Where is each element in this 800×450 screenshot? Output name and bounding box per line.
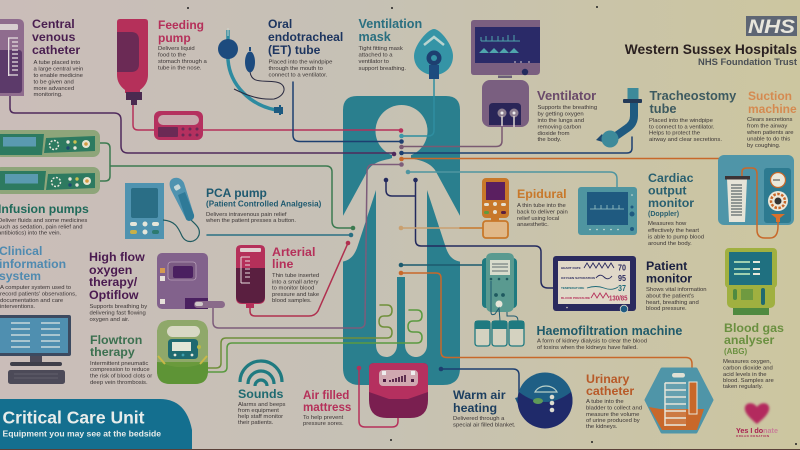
description: blood gas analyser: carbon dioxide and — [723, 366, 773, 372]
heading: air filled mattress: mattress — [303, 401, 351, 414]
heading: ventilation mask: mask — [358, 30, 392, 44]
tube: warm air — [439, 367, 519, 396]
description: central venous catheter: to enable medicine — [34, 73, 84, 79]
heading: blood gas analyser: analyser — [724, 333, 774, 347]
description: urinary catheter: A tube into the — [586, 399, 624, 405]
heading: arterial line: Arterial — [272, 245, 315, 259]
description: arterial line: pressure and take — [272, 292, 320, 298]
heading: clinical information system: information — [0, 257, 66, 271]
heading: epidural: Epidural — [517, 187, 567, 201]
heading: haemofiltration machine: Haemofiltration machine — [536, 324, 682, 338]
tube: central venous catheter — [10, 94, 396, 156]
heading: high flow oxygen therapy: High flow — [89, 250, 145, 264]
description: sounds: their patients. — [238, 420, 274, 426]
description: ventilator: into the lungs and — [538, 118, 584, 124]
description: ventilator: the body. — [538, 137, 562, 143]
heading: urinary catheter: catheter — [586, 384, 634, 398]
monitor readings: HEART RATE — [561, 266, 581, 270]
tube: tracheostomy — [399, 137, 632, 155]
icon: haemofiltration machine — [475, 253, 524, 346]
description: patient monitor: Shows vital information — [646, 287, 707, 293]
heading: PCA pump: (Patient Controlled Analgesia) — [206, 200, 322, 208]
description: epidural: anaesthetic. — [517, 222, 549, 228]
description: high flow oxygen therapy: Supports breathing by — [90, 304, 147, 310]
tube: haemofiltration — [399, 263, 483, 267]
description: blood gas analyser: taken regularly. — [723, 384, 763, 390]
description: suction machine: from the airway — [747, 124, 787, 130]
banner: critical care unit — [0, 399, 192, 449]
description: cardiac output monitor: is able to pump blood — [648, 234, 704, 240]
heading: central venous catheter: catheter — [32, 43, 80, 57]
heading: oral endotracheal tube: endotracheal — [268, 30, 343, 44]
icon: ventilation mask — [414, 29, 453, 79]
description: tracheostomy tube: to connect to a ventilator. — [649, 124, 715, 130]
heading: infusion pumps: Infusion pumps — [0, 202, 89, 216]
heading: flowtron therapy: Flowtron — [90, 333, 142, 347]
description: feeding pump: Delivers liquid — [158, 46, 195, 52]
description: urinary catheter: the kidneys. — [586, 424, 618, 430]
icon: donation heart — [745, 403, 769, 424]
tube: optiflow — [213, 162, 404, 328]
description: oral endotracheal tube: Placed into the windpipe — [268, 60, 333, 66]
icon: feeding pump — [154, 111, 203, 140]
description: feeding pump: stomach through a — [158, 59, 208, 65]
description: epidural: A thin tube into the — [517, 203, 567, 209]
description: arterial line: into a small artery — [272, 280, 319, 286]
icon: ventilator unit — [482, 80, 529, 127]
icon: optiflow machine — [157, 253, 225, 309]
description: oral endotracheal tube: through the mouth to — [268, 66, 324, 72]
description: oral endotracheal tube: connect to a ventilator. — [268, 72, 328, 78]
icon: tracheostomy tube — [596, 88, 642, 148]
description: sounds: help staff monitor — [238, 414, 283, 420]
description: feeding pump: food to the — [158, 52, 187, 58]
icon: NHS logo: NHS — [748, 17, 795, 38]
heading: warm air heating: heating — [453, 401, 497, 415]
description: blood gas analyser: Measures oxygen, — [723, 359, 771, 365]
description: blood gas analyser: acid levels in the — [723, 372, 767, 378]
tube: oral endotracheal — [293, 82, 404, 144]
heading: suction machine: machine — [748, 102, 797, 116]
organisation name: Western Sussex Hospitals — [625, 42, 797, 57]
tube: infusion pumps — [100, 143, 355, 230]
heading: tracheostomy tube: tube — [650, 101, 677, 116]
heading: clinical information system: Clinical — [0, 244, 42, 258]
description: haemofiltration machine: of toxins when the kidneys have failed. — [537, 345, 638, 351]
icon: flowtron pump — [157, 320, 208, 384]
icon: infusion pump two — [0, 167, 100, 194]
description: clinical information system: record patients' observations, — [0, 292, 77, 298]
heading: urinary catheter: Urinary — [586, 372, 629, 386]
tube: cardiac monitor — [406, 170, 617, 188]
description: flowtron therapy: compression to reduce — [90, 367, 150, 373]
description: feeding pump: tube in the nose. — [158, 66, 202, 72]
heading: feeding pump: Feeding — [158, 18, 204, 32]
tubes: flowtron leg coils — [208, 305, 422, 372]
description: ventilator: dioxide from — [538, 131, 570, 137]
icon: arterial blood bag — [236, 245, 265, 308]
description: urinary catheter: bladder to collect and — [586, 406, 642, 412]
heading: feeding pump: pump — [158, 31, 191, 45]
description: patient monitor: blood pressure. — [646, 306, 687, 312]
heading: cardiac output monitor: output — [648, 184, 687, 198]
heading: ventilation mask: Ventilation — [358, 17, 422, 31]
heading: clinical information system: system — [0, 269, 41, 283]
icon: epidural pump — [482, 178, 509, 238]
tube: ECG leads to patient monitor — [384, 178, 554, 288]
body silhouette — [343, 96, 460, 385]
heading: ventilator: Ventilator — [537, 88, 596, 103]
description: ventilator: removing carbon — [538, 124, 581, 130]
description: air filled mattress: To help prevent — [303, 415, 344, 421]
icon: blood gas analyser — [725, 248, 777, 315]
description: cardiac output monitor: around the body. — [648, 241, 692, 247]
monitor readings: OXYGEN SATURATION — [561, 276, 596, 280]
tube: urinary catheter — [399, 271, 692, 416]
description: clinical information system: A computer system used to — [0, 285, 72, 291]
description: air filled mattress: pressure sores. — [303, 421, 344, 427]
icon: urine bag — [646, 369, 712, 432]
monitor readings: TEMPERATURE — [561, 286, 584, 290]
heading: cardiac output monitor: Cardiac — [648, 171, 694, 185]
monitor readings: 130/85 — [609, 294, 628, 302]
heading: blood gas analyser: Blood gas — [724, 321, 784, 335]
icon: endotracheal tube — [218, 28, 284, 115]
description: ventilator: Supports the breathing — [538, 105, 597, 111]
heading: cardiac output monitor: (Doppler) — [648, 211, 679, 218]
heading: arterial line: line — [272, 257, 293, 271]
heading: oral endotracheal tube: Oral — [268, 17, 292, 31]
description: epidural: relief using local — [517, 216, 559, 222]
tube: air mattress — [357, 366, 398, 427]
heading: cardiac output monitor: monitor — [648, 196, 694, 210]
description: patient monitor: heart, breathing and — [646, 300, 699, 306]
bottom edge — [0, 449, 800, 450]
description: tracheostomy tube: airway and clear secretions. — [649, 137, 722, 143]
description: haemofiltration machine: A form of kidney dialysis to clear the blood — [537, 338, 647, 344]
description: tracheostomy tube: Helps to protect the — [649, 130, 701, 136]
description: warm air heating: special air filled blanket. — [453, 422, 516, 428]
icon: infusion pump one — [0, 130, 100, 157]
description: cardiac output monitor: effectively the heart — [648, 228, 699, 234]
heading: central venous catheter: venous — [32, 30, 75, 44]
description: infusion pumps: such as sedation, pain relief and — [0, 224, 82, 230]
description: sounds: from equipment — [238, 408, 279, 414]
description: epidural: back to deliver pain — [517, 210, 568, 216]
description: PCA pump: when the patient presses a button. — [205, 218, 296, 224]
description: central venous catheter: monitoring. — [34, 92, 63, 98]
description: flowtron therapy: deep vein thrombosis. — [90, 380, 148, 386]
heading: air filled mattress: Air filled — [303, 389, 349, 402]
description: clinical information system: documentation and care — [0, 298, 64, 304]
logo: yes I donate: ORGAN DONATION — [736, 434, 770, 438]
heading: oral endotracheal tube: (ET) tube — [268, 43, 321, 57]
description: urinary catheter: measure the volume — [586, 412, 640, 418]
description: central venous catheter: a large central vein — [34, 66, 83, 72]
icon: PCA pump — [125, 178, 199, 242]
heading: blood gas analyser: (ABG) — [724, 347, 747, 356]
description: ventilation mask: attached to a — [358, 52, 393, 58]
heading: warm air heating: Warm air — [453, 388, 506, 402]
description: suction machine: by coughing. — [747, 143, 781, 149]
description: flowtron therapy: the risk of blood clots or — [90, 374, 152, 380]
description: ventilation mask: support breathing. — [358, 66, 406, 72]
heading: sounds: Sounds — [238, 387, 284, 401]
tube: suction — [399, 157, 736, 177]
heading: tracheostomy tube: Tracheostomy — [650, 88, 737, 103]
heading: patient monitor: monitor — [646, 272, 692, 286]
description: central venous catheter: more advanced — [34, 86, 74, 92]
heading: high flow oxygen therapy: oxygen — [89, 263, 132, 277]
icon: sound waves — [240, 361, 282, 386]
heading: PCA pump: PCA pump — [206, 186, 267, 200]
icon: warm air heater — [515, 372, 572, 428]
description: clinical information system: interventions. — [0, 304, 35, 310]
monitor readings: 70 — [618, 262, 626, 272]
description: patient monitor: about the patient's — [646, 294, 694, 300]
description: urinary catheter: of urine produced by — [586, 418, 640, 424]
tube: feeding pump — [133, 104, 403, 133]
icon: suction machine — [718, 155, 794, 238]
description: infusion pumps: Deliver fluids and some medicines — [0, 218, 87, 224]
organisation subtitle: NHS Foundation Trust — [698, 56, 797, 67]
description: arterial line: to monitor blood — [272, 286, 314, 292]
description: ventilation mask: Tight fitting mask — [358, 46, 403, 52]
icon: ventilator screen — [471, 20, 540, 78]
description: sounds: Alarms and beeps — [238, 402, 286, 408]
monitor readings: BLOOD PRESSURE — [561, 296, 590, 300]
description: tracheostomy tube: Placed into the windpipe — [649, 118, 714, 124]
monitor readings: 95 — [618, 273, 626, 283]
tube: ventilation mask — [399, 78, 434, 138]
tube: PCA pump — [207, 233, 353, 237]
heading: high flow oxygen therapy: Optiflow — [89, 288, 139, 302]
icon: air mattress pump — [369, 363, 428, 418]
description: flowtron therapy: Intermittent pneumatic — [90, 361, 148, 367]
banner: critical care unit: Equipment you may see at the bedside — [2, 428, 161, 438]
description: ventilation mask: ventilator to — [358, 59, 390, 65]
description: arterial line: blood samples. — [272, 298, 312, 304]
logo: yes I donate: Yes I donate — [736, 426, 778, 435]
description: blood gas analyser: blood. Samples are — [723, 378, 774, 384]
monitor readings: 37 — [618, 283, 626, 293]
heading: patient monitor: Patient — [646, 259, 687, 273]
description: suction machine: unable to do this — [747, 136, 790, 142]
description: central venous catheter: A tube placed into — [34, 60, 81, 66]
tube: epidural — [399, 226, 483, 230]
heading: central venous catheter: Central — [32, 17, 75, 31]
description: PCA pump: Delivers intravenous pain relief — [206, 212, 287, 218]
description: cardiac output monitor: Measures how — [648, 221, 687, 227]
icon: patient monitor — [553, 256, 636, 313]
description: warm air heating: Delivered through a — [453, 416, 505, 422]
banner: critical care unit: Critical Care Unit — [2, 408, 145, 428]
tube: arterial line — [250, 241, 350, 316]
description: high flow oxygen therapy: delivering fast flowing — [90, 310, 146, 316]
description: suction machine: when patients are — [746, 130, 794, 136]
description: arterial line: Thin tube inserted — [272, 273, 319, 279]
description: ventilator: by getting oxygen — [538, 112, 584, 118]
icon: clinical information computer — [0, 315, 71, 384]
icon: feeding bag — [117, 19, 148, 105]
icon: cardiac output monitor — [578, 187, 637, 235]
description: high flow oxygen therapy: oxygen and air. — [90, 317, 130, 323]
description: central venous catheter: to be given and — [34, 80, 74, 86]
heading: high flow oxygen therapy: therapy/ — [89, 275, 138, 289]
tube: ventilator — [399, 126, 502, 149]
description: suction machine: Clears secretions — [747, 117, 793, 123]
heading: flowtron therapy: therapy — [90, 345, 135, 359]
monitor readings — [561, 262, 628, 302]
pin holes — [187, 6, 797, 445]
heading: suction machine: Suction — [748, 89, 792, 103]
icon: central venous catheter bag — [0, 19, 24, 96]
